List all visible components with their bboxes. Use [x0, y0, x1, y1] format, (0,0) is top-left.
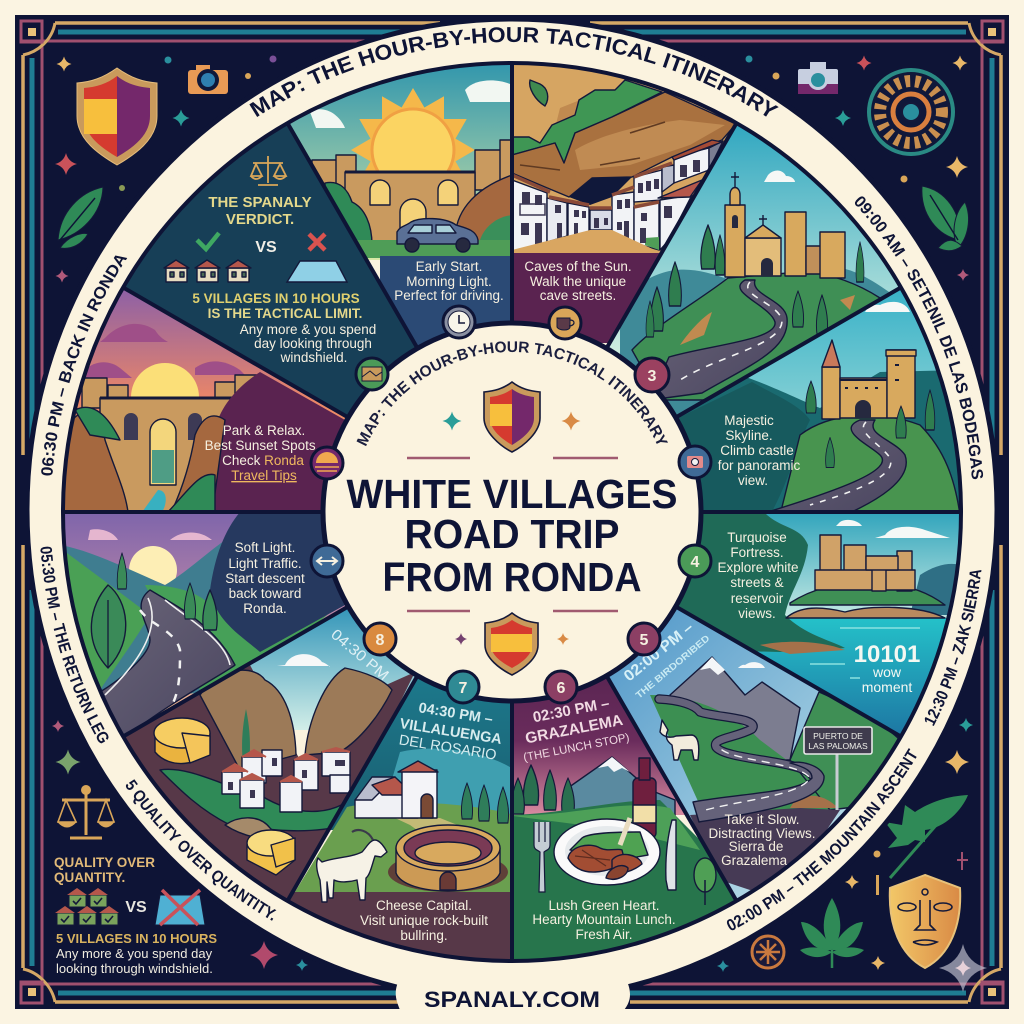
text: majestic skyline: for panoramic	[718, 458, 801, 473]
brand: spanaly.com: SPANALY.COM	[424, 987, 600, 1012]
ring label: back in ronda: 06:30 PM – BACK IN RONDA	[41, 256, 128, 476]
badge: number 5	[628, 623, 660, 655]
icon: orange camera	[188, 65, 228, 94]
panel: back in ronda sunset	[60, 285, 350, 515]
text: turquoise fortress: views.	[738, 606, 776, 621]
badge: number 8	[364, 623, 396, 655]
corner decorations: bottom left quality over quantity	[52, 720, 308, 976]
label: grazalema title: GRAZALEMA	[524, 712, 624, 747]
pie outline and spokes	[63, 63, 961, 961]
text: majestic skyline: Climb castle	[720, 443, 794, 458]
badge: number 5: 5	[640, 632, 649, 649]
text: park and relax: Travel Tips	[231, 468, 297, 483]
text: cheese capital: Cheese Capital.	[376, 898, 472, 913]
title: white villages road trip from ronda: ROAD TRIP	[404, 511, 620, 557]
icon: red cross	[309, 234, 325, 250]
label: vs: VS	[255, 239, 277, 256]
text: take it slow: Distracting Views.	[708, 826, 816, 841]
label: vs: VS	[125, 899, 147, 916]
text: take it slow: Take it Slow.	[724, 812, 800, 827]
text: cheese capital: bullring.	[400, 928, 448, 943]
badge: number 6: 6	[557, 680, 566, 697]
icon: bottom shield	[485, 613, 538, 675]
icon: heraldic shield	[77, 68, 157, 165]
sign: puerto de las palomas: LAS PALOMAS	[808, 741, 868, 751]
wedge fill	[124, 124, 512, 512]
scene: sunset bridge	[60, 285, 350, 515]
label: grazalema title: (THE LUNCH STOP)	[522, 732, 631, 764]
badge: number 6	[545, 671, 577, 703]
icon: mandala medallion	[869, 70, 953, 154]
badge: number 4	[679, 545, 711, 577]
text: cheese capital: Visit unique rock-built	[360, 913, 488, 928]
title: white villages road trip from ronda: FROM RONDA	[382, 554, 642, 600]
text: soft light: Ronda.	[243, 601, 287, 616]
panel: church and road	[610, 126, 898, 414]
text: turquoise fortress: reservoir	[731, 591, 784, 606]
text: soft light: Soft Light.	[235, 540, 295, 555]
decorative stars and dots	[55, 56, 276, 282]
icon: cannabis-like leaf	[800, 898, 864, 968]
label: villaluenga title	[398, 700, 503, 764]
text: any more: windshield.	[280, 350, 347, 365]
stat: 10101 wow moment: wow	[872, 664, 902, 680]
text: caves of the sun: Caves of the Sun.	[524, 259, 632, 274]
ring label: setenil: 09:00 AM – SETENIL DE LAS BODEGAS	[854, 196, 984, 480]
corner decorations: top left	[55, 56, 276, 282]
text: any more: Any more & you spend	[240, 322, 376, 337]
scene: dusk road	[60, 510, 350, 745]
text: turquoise fortress: Turquoise	[727, 530, 787, 545]
panel: grazalema lunch stop	[514, 678, 734, 959]
label: 04:30 pm: 04:30 PM	[327, 626, 392, 684]
badge: two way arrow	[311, 545, 343, 577]
text: lush green heart: Fresh Air.	[575, 927, 633, 942]
scene: fortress and reservoir	[678, 514, 959, 734]
badge: number 3	[635, 358, 669, 392]
icon: round ornament	[752, 936, 784, 968]
icon: green check	[197, 233, 219, 249]
badge: number 8: 8	[376, 632, 385, 649]
hub arc text: MAP: THE HOUR-BY-HOUR TACTICAL ITINERARY	[356, 341, 668, 446]
text: caves of the sun: Walk the unique	[530, 274, 626, 289]
panel: early start sunrise over ronda	[280, 60, 515, 346]
heading: quality over quantity: QUALITY OVER	[54, 855, 155, 870]
icon: small scales	[251, 156, 286, 185]
hub decorations	[407, 412, 618, 645]
ring label: mountain ascent: 02:00 PM – THE MOUNTAIN ASCENT	[726, 748, 917, 930]
text: take it slow: Sierra de	[729, 839, 783, 854]
panel: mountain ascent puerto de las palomas	[610, 610, 898, 898]
label: the enchanted garbled: THE BIRDORIBED	[634, 633, 712, 701]
corner decorations: bottom right	[717, 718, 987, 992]
icon: crossed out windshield	[155, 890, 205, 925]
text: majestic skyline: view.	[738, 473, 768, 488]
panel: caves of the sun setenil	[510, 60, 742, 343]
badge: coffee	[549, 307, 581, 339]
label: villaluenga title: 04:30 PM –	[417, 700, 494, 728]
badge: number 7	[447, 671, 479, 703]
panel: turquoise fortress zahara	[678, 514, 959, 734]
text: five villages note: 5 VILLAGES IN 10 HOURS	[56, 931, 217, 946]
text: lush green heart: Hearty Mountain Lunch.	[532, 912, 676, 927]
scene: cave street	[510, 60, 742, 343]
label: grazalema title	[522, 695, 631, 764]
icon: large green leaf sprig	[885, 795, 968, 878]
text: majestic skyline: Majestic	[724, 413, 774, 428]
icon: green leaf	[922, 186, 969, 251]
text: park and relax: Check Ronda	[222, 453, 304, 468]
text: soft light: Start descent	[225, 571, 305, 586]
decorative stars and dots	[717, 718, 987, 992]
text: turquoise fortress: Explore white	[717, 560, 799, 575]
title: white villages road trip from ronda	[346, 471, 678, 600]
text: early start: Perfect for driving.	[394, 288, 504, 303]
title: white villages road trip from ronda: WHITE VILLAGES	[346, 471, 678, 517]
icon: gold scales	[58, 786, 114, 838]
text: five villages note: looking through windshield.	[56, 961, 213, 976]
badge: sunset	[311, 447, 343, 479]
text: turquoise fortress: streets &	[730, 575, 784, 590]
badge: number 4: 4	[691, 554, 700, 571]
sign: puerto de las palomas: PUERTO DE	[813, 731, 863, 741]
panel: the spanaly verdict	[124, 124, 512, 512]
text: soft light: back toward	[229, 586, 301, 601]
label: villaluenga title: DEL ROSARIO	[398, 732, 498, 764]
badge: camera	[679, 446, 711, 478]
icon: purple camera	[798, 62, 838, 94]
scene: church on hill	[610, 126, 898, 414]
stat: 10101 wow moment: moment	[862, 679, 912, 695]
text: tactical limit: 5 VILLAGES IN 10 HOURS	[192, 291, 360, 306]
icon: five checked houses	[55, 888, 119, 925]
text: lush green heart: Lush Green Heart.	[548, 898, 660, 913]
icon: top shield	[484, 382, 540, 452]
text: early start: Morning Light.	[406, 274, 492, 289]
text: take it slow: Grazalema.	[721, 853, 791, 868]
decorative stars and dots	[746, 56, 969, 281]
panel: majestic skyline castle	[678, 290, 959, 510]
label: 02:00 pm: 02:00 PM –	[621, 619, 697, 685]
text: five villages note: Any more & you spend day	[56, 946, 213, 961]
panel: return leg soft light	[60, 510, 350, 745]
stat: 10101 wow moment: 10101	[854, 641, 920, 668]
panel: cheese village	[126, 610, 414, 898]
scene: castle on hill	[678, 290, 959, 510]
stat: 10101 wow moment	[854, 641, 920, 695]
decorative stars and dots	[52, 720, 308, 971]
text: early start: Early Start.	[416, 259, 482, 274]
badge: map	[356, 358, 388, 390]
corner decorations: top right	[746, 56, 969, 281]
text: tactical limit: IS THE TACTICAL LIMIT.	[208, 306, 362, 321]
text: soft light: Light Traffic.	[228, 556, 302, 571]
ring label: map itinerary: MAP: THE HOUR-BY-HOUR TACTICAL ITINERARY	[249, 27, 779, 117]
scene: mountain road	[610, 610, 898, 898]
text: any more: day looking through	[254, 336, 372, 351]
text: turquoise fortress: Fortress.	[730, 545, 784, 560]
scene: sunrise bridge	[280, 60, 515, 346]
label: villaluenga title: VILLALUENGA	[398, 716, 503, 748]
heading: the spanaly verdict: VERDICT.	[226, 211, 294, 228]
ring label: zak sierra: 12:30 PM – ZAK SIERRA	[924, 570, 982, 726]
heading: the spanaly verdict: THE SPANALY	[208, 194, 312, 211]
ring label: return leg: 05:30 PM – THE RETURN LEG	[40, 546, 108, 744]
text: caves of the sun: cave streets.	[540, 288, 616, 303]
badge: number 7: 7	[459, 680, 468, 697]
ring label: quality over quantity: 5 QUALITY OVER QUANTITY.	[126, 779, 276, 921]
label: grazalema title: 02:30 PM –	[531, 695, 611, 726]
badge: number 3: 3	[648, 368, 657, 385]
scene: lunch in the hills	[514, 678, 734, 959]
bottom brand tab	[396, 975, 630, 1010]
text: majestic skyline: Skyline.	[725, 428, 773, 443]
text: park and relax: Park & Relax.	[223, 423, 305, 438]
icon: golden tribal mask shield	[890, 875, 960, 968]
scene: goat and bullring	[290, 678, 510, 959]
panel: villaluenga del rosario	[290, 678, 510, 959]
center cream hub	[323, 323, 701, 701]
icon: green leaf	[58, 187, 103, 248]
scene: rock gorge and cheese	[126, 610, 414, 898]
icon: three houses	[164, 260, 251, 282]
heading: quality over quantity: QUANTITY.	[54, 870, 125, 885]
icon: windshield	[287, 261, 347, 282]
text: park and relax: Best Sunset Spots.	[205, 438, 319, 453]
badge: clock	[443, 306, 475, 338]
